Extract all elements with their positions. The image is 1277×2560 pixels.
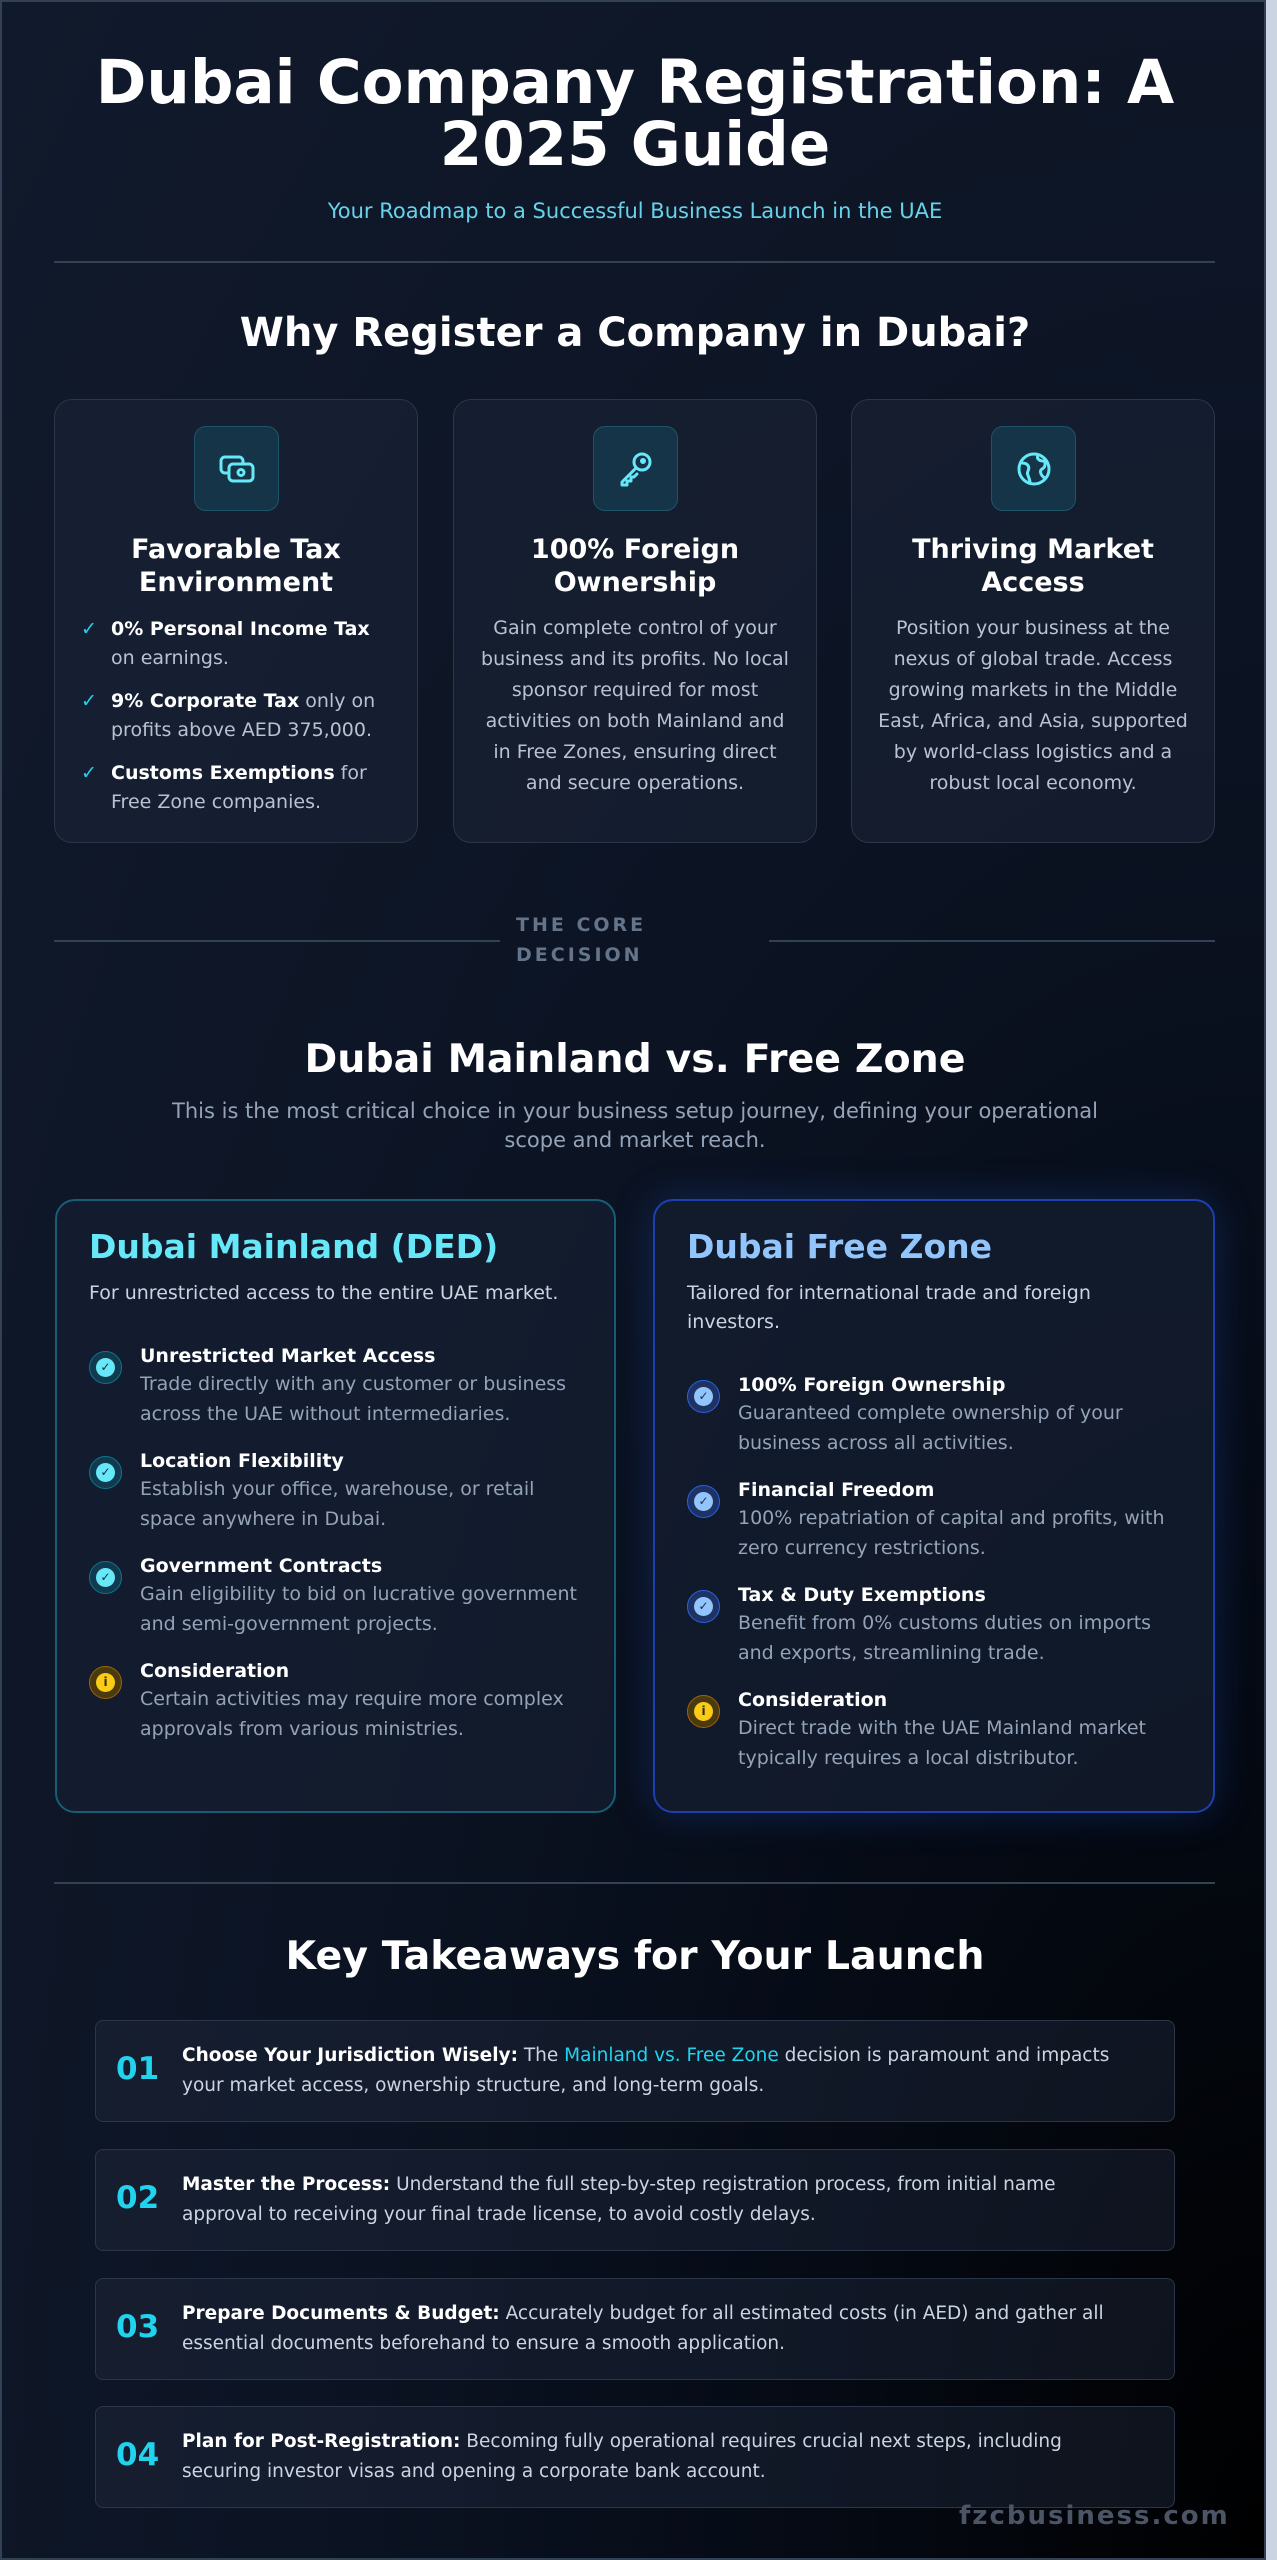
card: favorable tax: Customs Exemptions for Free Zone companies. [111,762,367,813]
watermark: fzcbusiness.com [959,2501,1230,2531]
card title: Access [981,567,1085,598]
card title: Ownership [554,567,716,598]
panel: free zone: 100% Foreign Ownership [738,1374,1006,1396]
item: consideration [89,1660,564,1740]
panel: mainland: Gain eligibility to bid on lucrative government and semi-government projects. [140,1583,577,1635]
takeaway 03: Prepare Documents & Budget: Accurately budget for all estimated costs (in AED) and gather all essential documents beforehand to ensure a smooth application. [182,2303,1104,2354]
panel subtitle: Tailored for international trade and foreign investors. [687,1282,1091,1333]
item: consideration [687,1689,1146,1769]
panel: mainland: i [103,1675,108,1689]
panel: mainland: Certain activities may require more complex approvals from various ministries. [140,1688,564,1740]
card: favorable tax: 9% Corporate Tax only on profits above AED 375,000. [111,690,375,741]
list [81,618,370,669]
panel: mainland: Unrestricted Market Access [140,1345,435,1367]
heading: why register: Why Register a Company in Dubai? [240,310,1030,356]
subtitle: Your Roadmap to a Successful Business Launch in the UAE [328,199,942,223]
card: favorable tax [54,399,418,843]
takeaway 03: 03 [116,2309,159,2345]
panel: mainland: ✓ [100,1570,111,1584]
heading: key takeaways: Key Takeaways for Your Launch [286,1933,984,1979]
panel: mainland: Consideration [140,1660,289,1682]
takeaway 01 [95,2020,1175,2122]
panel: mainland: Location Flexibility [140,1450,344,1472]
panel: free zone: i [701,1704,706,1718]
card: favorable tax: ✓ [81,618,97,640]
takeaway 01: 01 [116,2051,159,2087]
item [687,1374,1123,1454]
item [687,1584,1151,1664]
icon: globe [991,426,1076,511]
intro text: This is the most critical choice in your business setup journey, defining your operational scope and market reach. [172,1099,1098,1152]
card title: Thriving Market [912,534,1154,565]
panel: free zone [653,1199,1215,1813]
takeaway 02: Master the Process: Understand the full step-by-step registration process, from initial name approval to receiving your final trade license, to avoid costly delays. [182,2174,1056,2225]
card: favorable tax: ✓ [81,690,97,712]
panel heading: Dubai Mainland (DED) [89,1227,498,1266]
panel: mainland [55,1199,616,1813]
takeaway 04: 04 [116,2437,159,2473]
takeaway 03 [95,2278,1175,2380]
heading: mainland vs free zone: Dubai Mainland vs. Free Zone [304,1036,966,1082]
card title: Favorable Tax [131,534,341,565]
panel: free zone: Financial Freedom [738,1479,934,1501]
card title [531,534,739,598]
icon: money [194,426,279,511]
panel: mainland: Establish your office, warehouse, or retail space anywhere in Dubai. [140,1478,534,1530]
panel: free zone: Benefit from 0% customs duties on imports and exports, streamlining trade. [738,1612,1151,1664]
panel: mainland: Government Contracts [140,1555,382,1577]
panel: free zone: Guaranteed complete ownership of your business across all activities. [738,1402,1123,1454]
card title: Environment [139,567,333,598]
panel: free zone: Direct trade with the UAE Mainland market typically requires a local distributor. [738,1717,1146,1769]
icon: key [593,426,678,511]
takeaway 02: 02 [116,2180,159,2216]
panel: free zone: Tax & Duty Exemptions [738,1584,986,1606]
takeaway 02 [95,2149,1175,2251]
item [89,1345,566,1425]
takeaway 01: Choose Your Jurisdiction Wisely: The Mainland vs. Free Zone decision is paramount and impacts your market access, ownership structure, and long-term goals. [182,2045,1109,2096]
card title: 100% Foreign [531,534,739,565]
panel subtitle: For unrestricted access to the entire UAE market. [89,1282,558,1304]
title: 2025 Guide [440,109,830,180]
takeaway 04 [95,2406,1175,2508]
item [89,1450,534,1530]
panel: mainland: Trade directly with any customer or business across the UAE without intermediaries. [140,1373,566,1425]
card title [131,534,341,598]
card body: Position your business at the nexus of global trade. Access growing markets in the Middle East, Africa, and Asia, supported by world-class logistics and a robust local economy. [878,617,1188,794]
card title [912,534,1154,598]
item [89,1555,577,1635]
panel: mainland: ✓ [100,1465,111,1479]
panel: free zone: ✓ [698,1494,709,1508]
panel: free zone: Consideration [738,1689,887,1711]
card body: Gain complete control of your business and its profits. No local sponsor required for most activities on both Mainland and in Free Zones, ensuring direct and secure operations. [481,617,789,794]
panel: free zone: 100% repatriation of capital and profits, with zero currency restrictions. [738,1507,1165,1559]
label: the core decision: THE CORE DECISION [516,914,646,966]
item [687,1479,1165,1559]
title: Dubai Company Registration: A [96,47,1174,118]
panel: free zone: ✓ [698,1599,709,1613]
takeaway 04: Plan for Post-Registration: Becoming fully operational requires crucial next steps, including securing investor visas and opening a corporate bank account. [182,2431,1062,2482]
card: foreign ownership [453,399,817,843]
panel: mainland: ✓ [100,1360,111,1374]
panel heading: Dubai Free Zone [687,1227,992,1266]
panel: free zone: ✓ [698,1389,709,1403]
card: favorable tax: ✓ [81,762,97,784]
card: market access [851,399,1215,843]
card: favorable tax: 0% Personal Income Tax on earnings. [111,618,370,669]
title [96,47,1174,180]
